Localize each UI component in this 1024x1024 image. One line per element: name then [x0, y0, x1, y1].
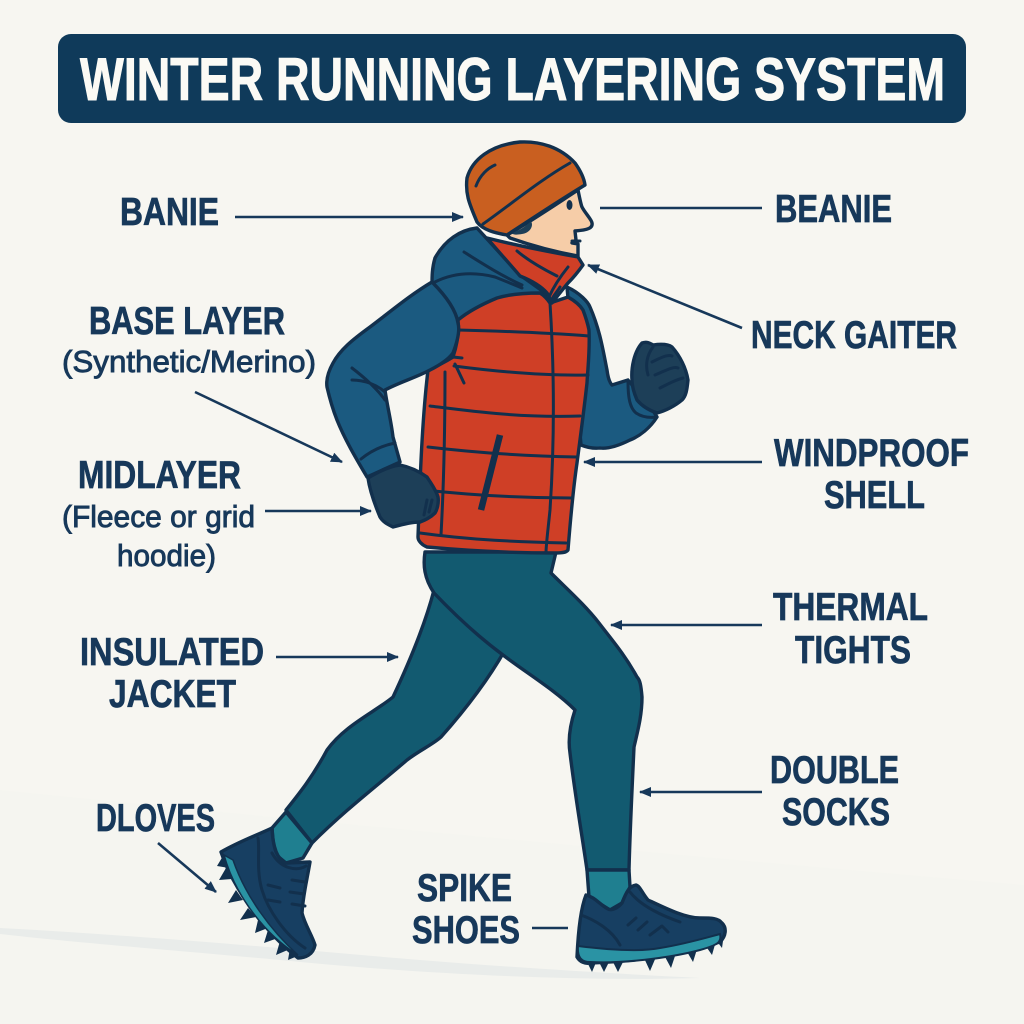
- near arm sleeve: [327, 282, 459, 477]
- label: Insulated jacket: JACKET: [109, 673, 236, 716]
- label: Midlayer: hoodie): [117, 538, 216, 573]
- label: Windproof shell: [584, 432, 969, 517]
- beanie: [467, 142, 585, 235]
- left mitten: [368, 465, 438, 527]
- label: Windproof shell: WINDPROOF: [774, 432, 969, 475]
- front leg with tights: [424, 552, 642, 870]
- back sock: [272, 812, 312, 863]
- label: Base layer: [62, 300, 342, 462]
- label: Midlayer: [62, 454, 371, 573]
- label: Base layer: BASE LAYER: [89, 300, 285, 343]
- front sock: [587, 870, 630, 910]
- vest: [418, 293, 589, 553]
- far arm sleeve: [567, 287, 657, 448]
- label: Midlayer: MIDLAYER: [78, 454, 241, 497]
- label: Banie: BANIE: [120, 191, 219, 234]
- hood: [432, 228, 548, 322]
- label: Gloves: DLOVES: [96, 797, 215, 840]
- front shoe: [577, 885, 725, 972]
- label: Spike shoes: [412, 867, 568, 952]
- label: Double socks: SOCKS: [782, 791, 890, 834]
- neck gaiter: [487, 238, 583, 303]
- label: Gloves: [96, 797, 216, 892]
- right mitten: [628, 342, 688, 417]
- back leg with tights: [286, 590, 505, 843]
- label: Base layer: (Synthetic/Merino): [62, 344, 316, 379]
- runner figure: [217, 142, 725, 972]
- label: Spike shoes: SHOES: [412, 909, 520, 952]
- face: [507, 190, 592, 256]
- label: Neck gaiter: NECK GAITER: [751, 314, 957, 357]
- label: Midlayer: (Fleece or grid: [62, 499, 255, 534]
- back shoe: [217, 828, 315, 960]
- label: Double socks: DOUBLE: [770, 749, 899, 792]
- label: Spike shoes: SPIKE: [417, 867, 512, 910]
- pocket: [481, 435, 500, 510]
- ear band: [510, 221, 532, 235]
- label: Double socks: [640, 749, 899, 834]
- front shoe spikes: [586, 934, 724, 972]
- eye: [566, 200, 572, 210]
- label: Windproof shell: SHELL: [824, 474, 925, 517]
- label: Insulated jacket: [80, 631, 398, 716]
- back shoe spikes: [217, 856, 300, 960]
- label: Thermal tights: [611, 586, 928, 672]
- label: Insulated jacket: INSULATED: [80, 631, 264, 674]
- label: Beanie: BEANIE: [775, 188, 892, 231]
- label: Thermal tights: THERMAL: [773, 586, 928, 629]
- label: Thermal tights: TIGHTS: [795, 629, 911, 672]
- label: Neck gaiter: [588, 265, 957, 357]
